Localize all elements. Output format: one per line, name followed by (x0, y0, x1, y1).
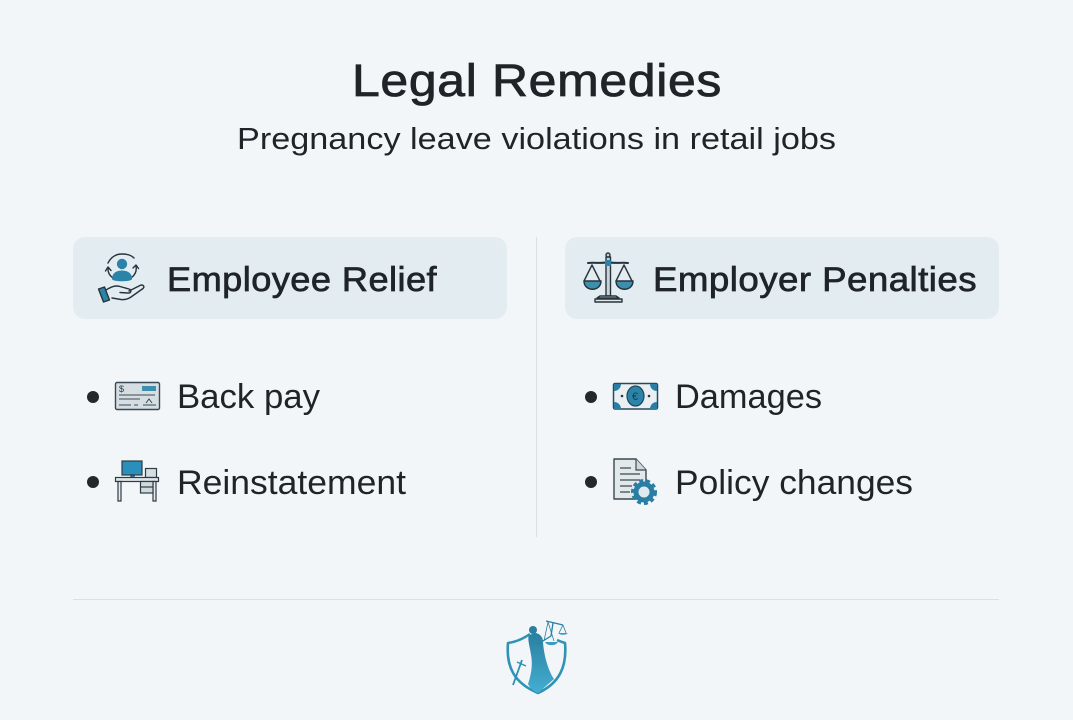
icon: scales of justice (584, 253, 633, 302)
list item: policy changes (585, 459, 913, 504)
subtitle: Pregnancy leave violations in retail jobs (237, 121, 836, 156)
list item: back pay: Back pay (177, 378, 320, 416)
icon: banknote (614, 384, 658, 409)
panel: employee relief header (73, 237, 507, 319)
list item: policy changes: Policy changes (675, 464, 913, 502)
list item: back pay (87, 378, 320, 416)
list item: damages (585, 378, 822, 416)
icon: desk with monitor (116, 461, 158, 501)
list item: damages: Damages (675, 378, 822, 416)
heading: employer penalties: Employer Penalties (653, 261, 977, 299)
icon: cheque: $ (119, 384, 124, 394)
icon: cheque (116, 382, 160, 410)
logo: lady justice shield (508, 621, 568, 693)
title: Legal Remedies (352, 55, 722, 106)
list item: reinstatement: Reinstatement (177, 464, 407, 502)
icon: banknote: € (632, 391, 638, 403)
heading: employee relief: Employee Relief (167, 261, 437, 299)
icon: document with gear (614, 459, 656, 504)
panel: employer penalties header (565, 237, 999, 319)
icon: hand holding person (98, 254, 144, 302)
list item: reinstatement (87, 461, 407, 502)
